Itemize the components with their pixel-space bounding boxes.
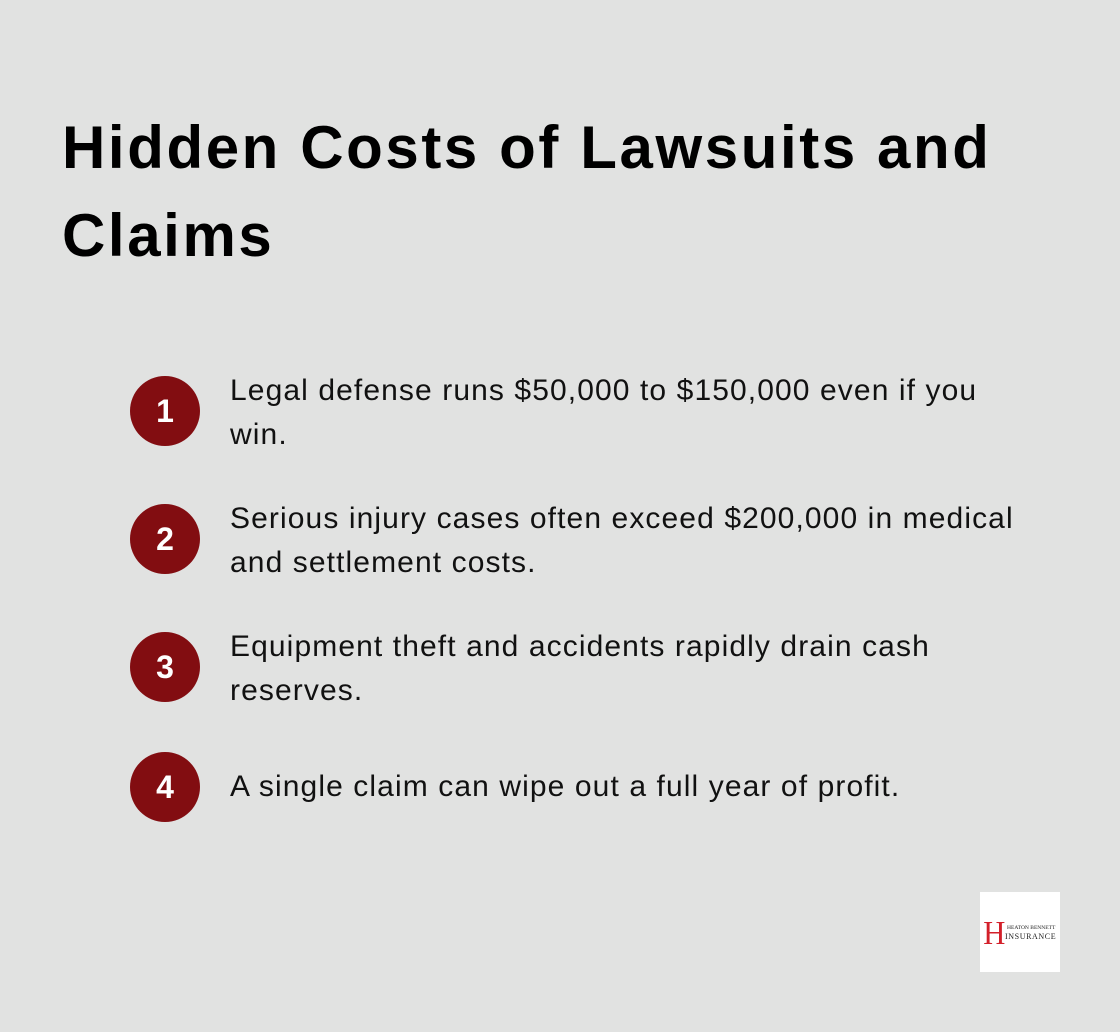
item 3: 3 [156,649,174,685]
item 4: 4 [156,769,174,805]
logo: HEATON BENNETT [1007,925,1055,931]
logo: INSURANCE [1005,932,1056,941]
item 4 [130,752,900,822]
item 4: A single claim can wipe out a full year of profit. [230,770,900,803]
title: Hidden Costs of Lawsuits and Claims [62,114,992,269]
item 1: 1 [156,393,174,429]
logo [980,892,1060,972]
item 2: Serious injury cases often exceed $200,000 in medical and settlement costs. [230,502,1014,579]
logo: H [983,915,1005,952]
item 1: Legal defense runs $50,000 to $150,000 even if you win. [230,374,977,451]
item 3: Equipment theft and accidents rapidly drain cash reserves. [230,630,930,707]
item 2: 2 [156,521,174,557]
